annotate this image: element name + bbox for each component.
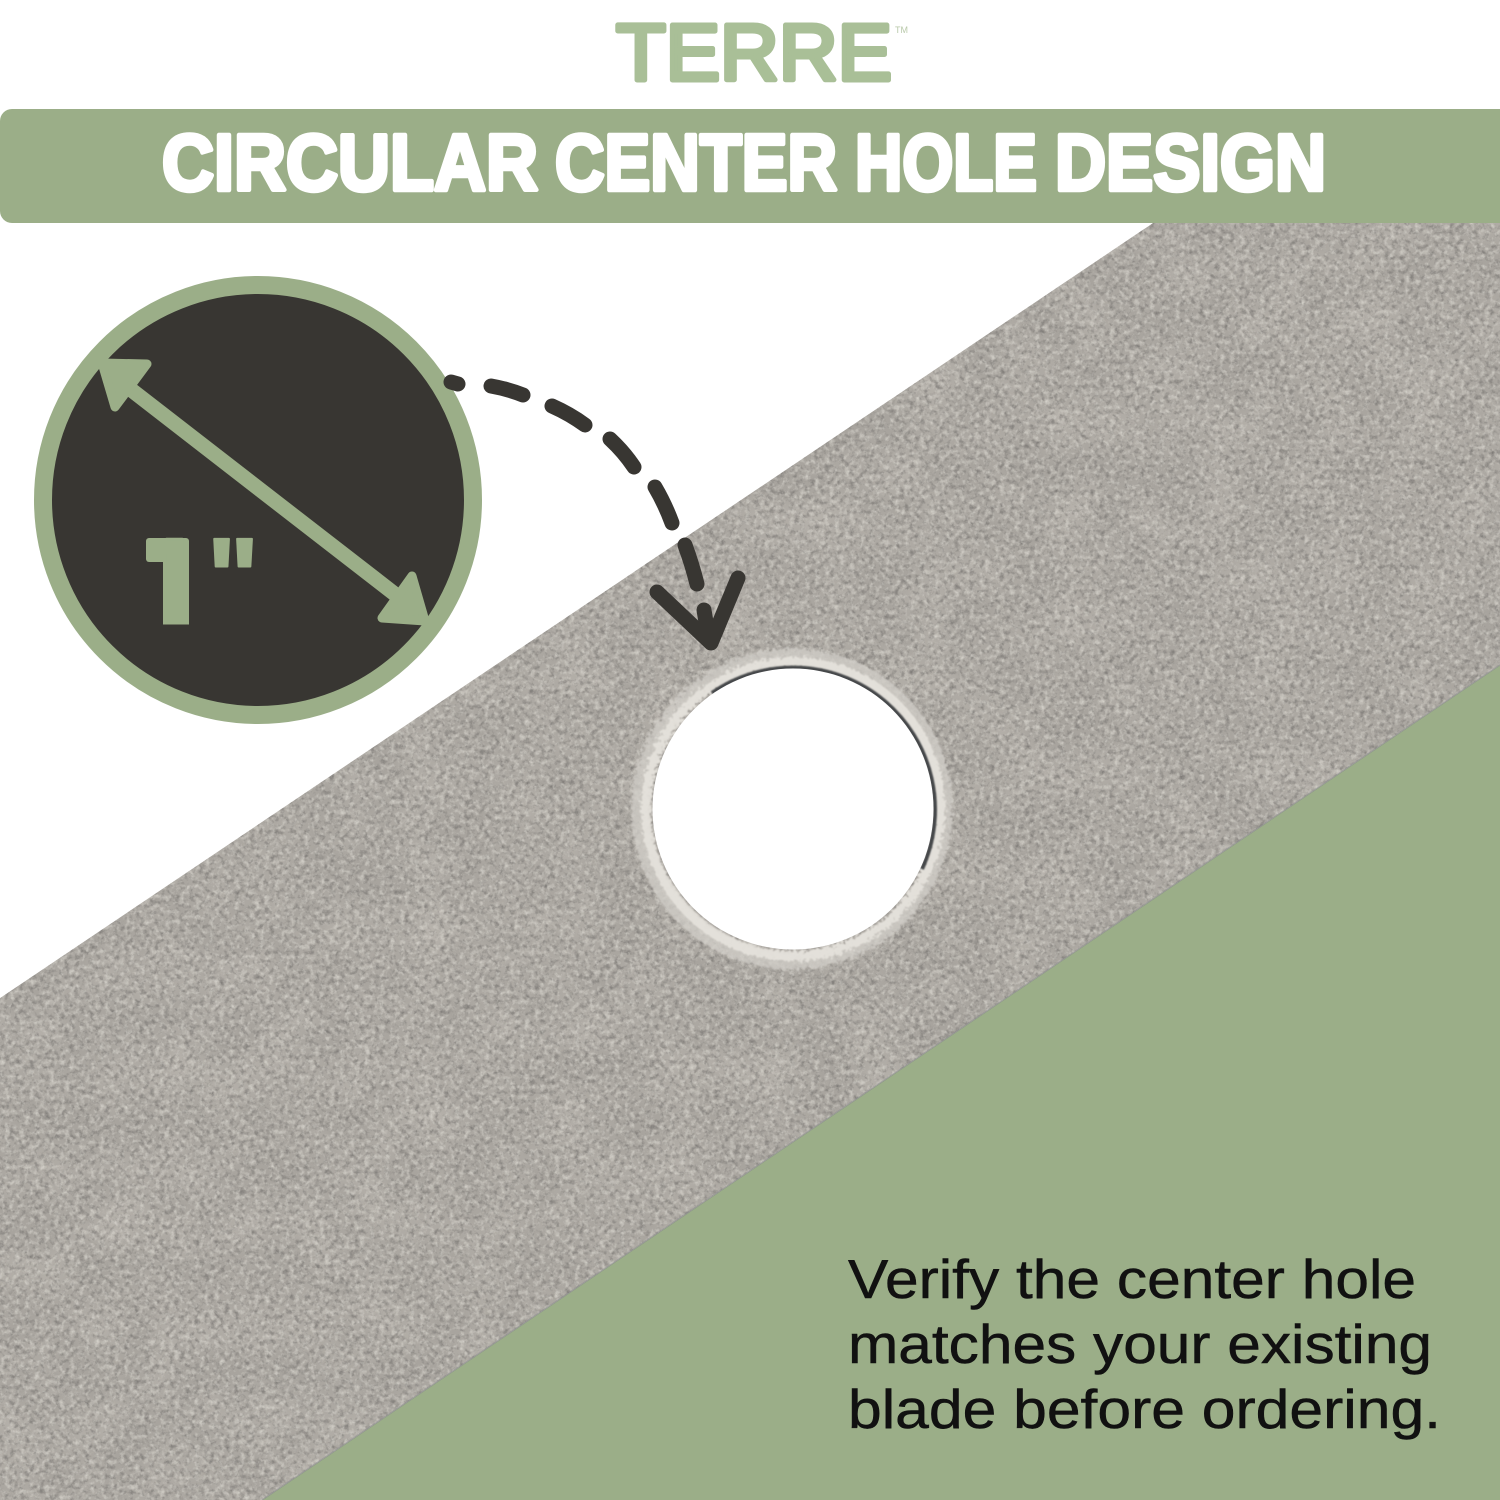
heading: DESIGN (1055, 118, 1326, 207)
body text: Verify the center hole (848, 1248, 1416, 1310)
blade center hole (640, 657, 944, 961)
size label: " (207, 516, 259, 639)
logo: TERRE: TERRE (616, 8, 892, 97)
heading: CENTER (555, 118, 837, 207)
dashed curved arrow (451, 382, 738, 643)
size label (146, 538, 253, 624)
green corner background (262, 665, 1500, 1500)
size label: 1 (137, 513, 205, 649)
body text: matches your existing (848, 1313, 1432, 1375)
header band (0, 109, 1500, 223)
logo: TERRE: TM (895, 25, 908, 35)
heading: HOLE (855, 118, 1037, 207)
body text (848, 1248, 1441, 1440)
dimension circle callout (43, 285, 473, 715)
double arrow (102, 363, 425, 621)
body text: blade before ordering. (848, 1378, 1441, 1440)
heading: CIRCULAR (162, 118, 538, 207)
